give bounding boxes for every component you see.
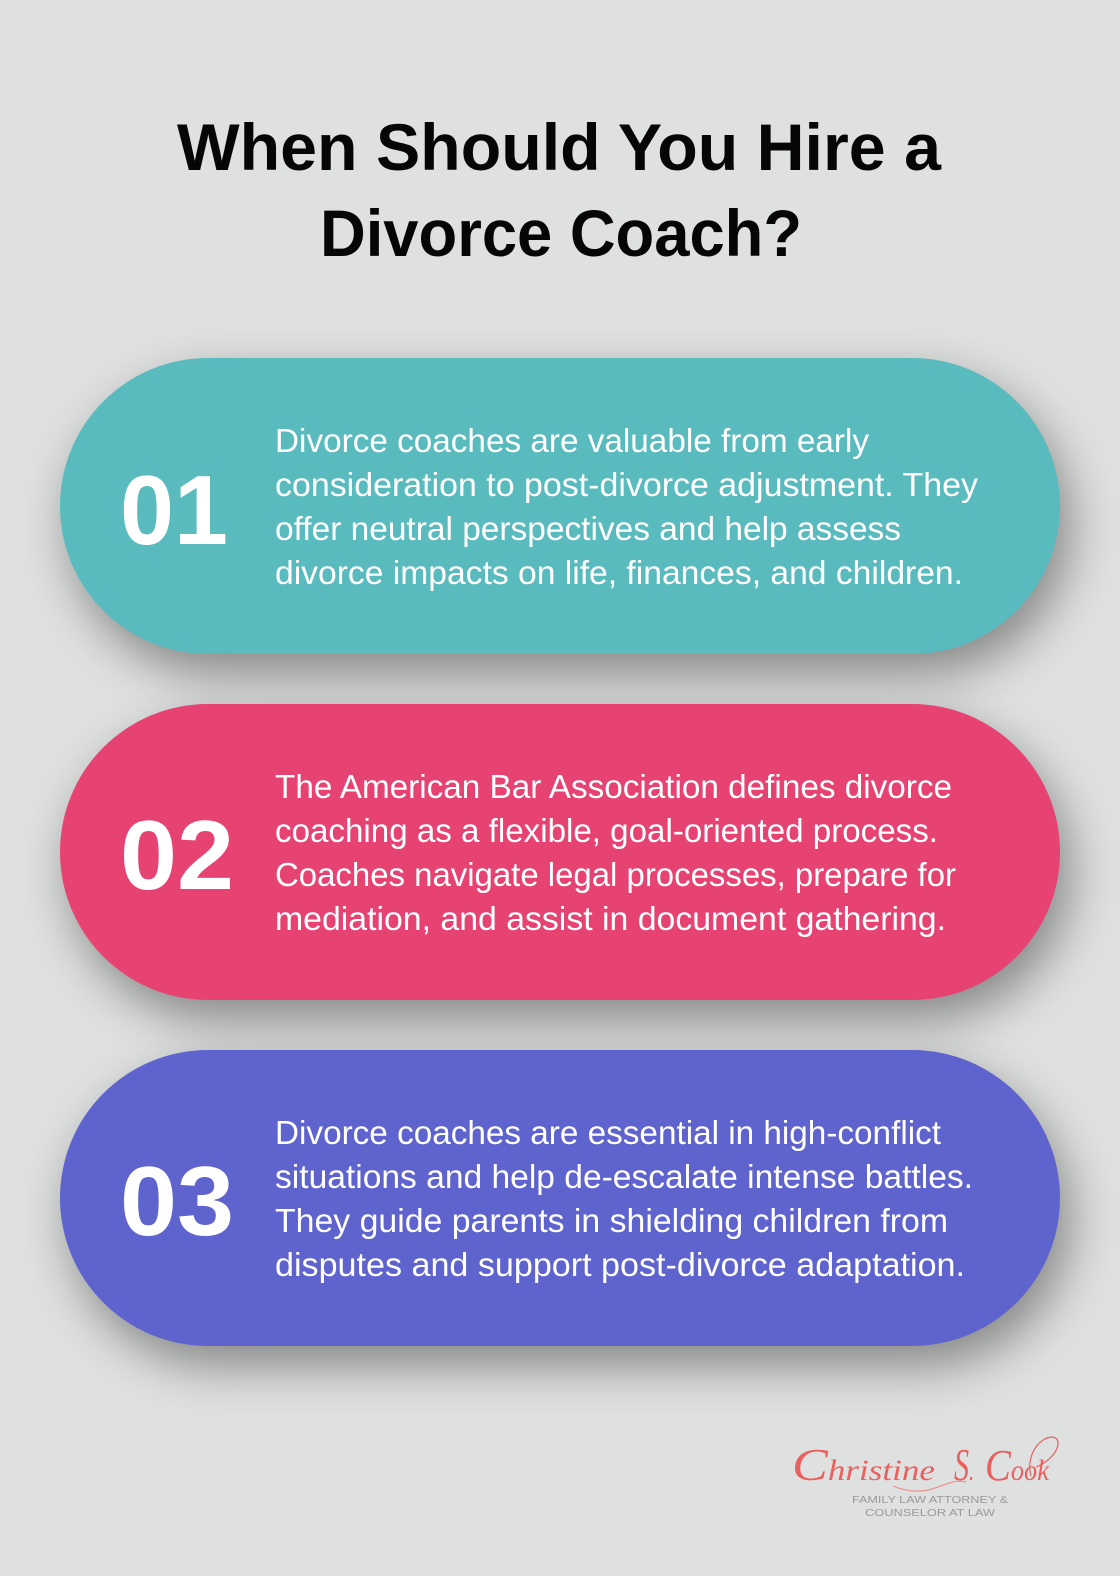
logo tagline: FAMILY LAW ATTORNEY & xyxy=(852,1494,1008,1506)
step 01 text: consideration to post-divorce adjustment. They xyxy=(275,466,979,503)
step 01 text: Divorce coaches are valuable from early xyxy=(275,422,870,459)
step 03 text: Divorce coaches are essential in high-conflict xyxy=(275,1114,941,1151)
logo signature xyxy=(792,1437,1058,1491)
step 02 text: mediation, and assist in document gathering. xyxy=(275,900,946,937)
panel: step 03 xyxy=(60,1050,1060,1346)
step number 03: 03 xyxy=(120,1146,234,1256)
logo tagline xyxy=(852,1494,1008,1519)
logo signature: Christine xyxy=(792,1439,935,1490)
logo tagline: COUNSELOR AT LAW xyxy=(865,1507,995,1519)
step 01 text: offer neutral perspectives and help assess xyxy=(275,510,901,547)
logo signature: Cook xyxy=(985,1441,1050,1490)
logo signature: S. xyxy=(954,1439,974,1490)
step 03 text: disputes and support post-divorce adaptation. xyxy=(275,1246,965,1283)
panel: step 02 xyxy=(60,704,1060,1000)
step 02 text xyxy=(275,768,956,937)
step 01 text xyxy=(275,422,979,591)
title xyxy=(177,110,942,270)
panel: step 01 xyxy=(60,358,1060,654)
step 03 text: situations and help de-escalate intense battles. xyxy=(275,1158,973,1195)
logo: Christine S. Cook xyxy=(792,1436,1059,1519)
step 02 text: Coaches navigate legal processes, prepare for xyxy=(275,856,956,893)
step 03 text: They guide parents in shielding children from xyxy=(275,1202,948,1239)
title: Divorce Coach? xyxy=(320,196,802,270)
step 03 text xyxy=(275,1114,973,1283)
step 02 text: The American Bar Association defines divorce xyxy=(275,768,952,805)
title: When Should You Hire a xyxy=(177,110,942,184)
step number 01: 01 xyxy=(120,455,228,565)
step number 02: 02 xyxy=(120,800,234,910)
step 01 text: divorce impacts on life, finances, and children. xyxy=(275,554,963,591)
step 02 text: coaching as a flexible, goal-oriented process. xyxy=(275,812,938,849)
